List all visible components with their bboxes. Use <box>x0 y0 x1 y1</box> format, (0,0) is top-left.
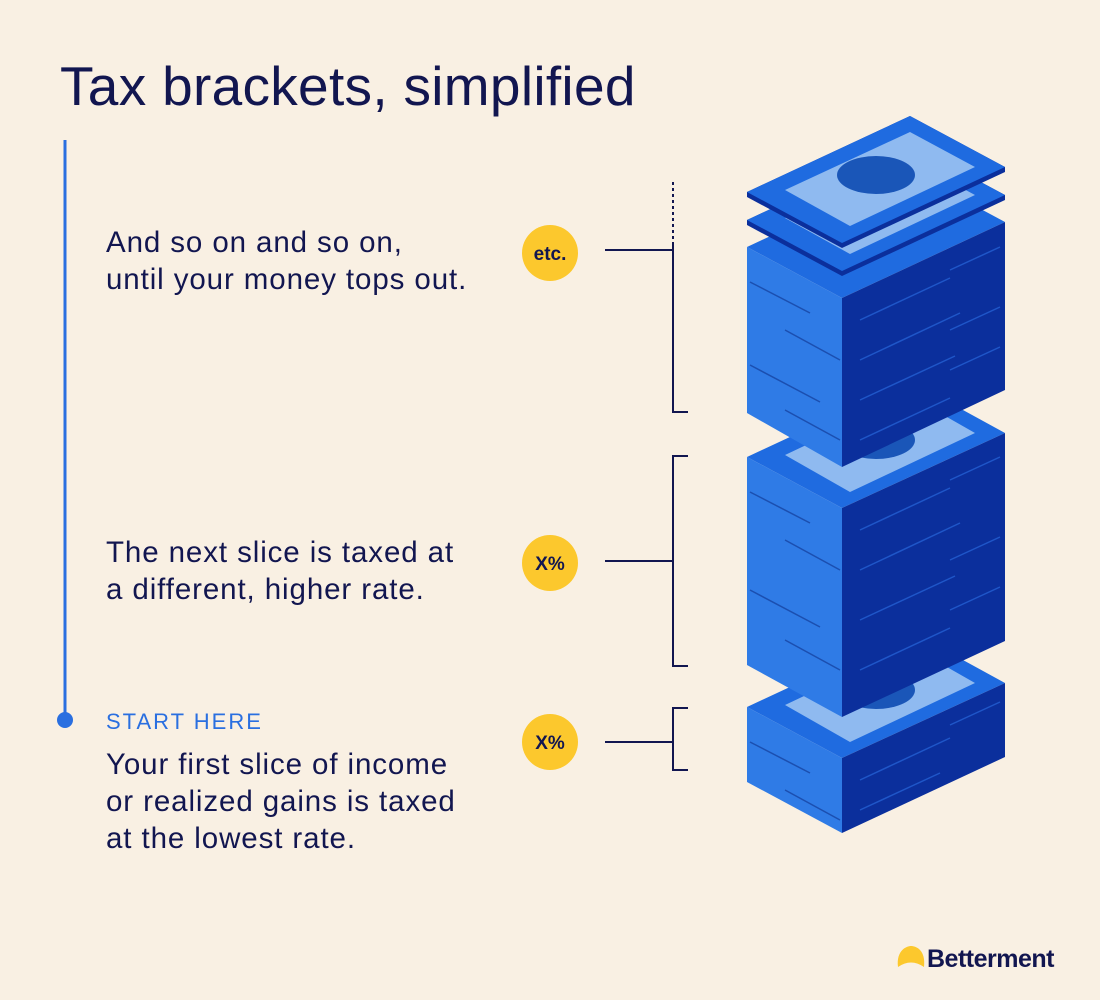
text: next slice <box>106 536 454 606</box>
text: etc: And so on and so on, <box>106 226 403 259</box>
bracket: middle <box>605 456 688 666</box>
stack: middle <box>747 381 1005 717</box>
bill 2 <box>747 144 1005 276</box>
text: first slice: Your first slice of income <box>106 748 448 781</box>
title: Tax brackets, simplified <box>60 55 636 117</box>
badge: x% bottom <box>522 714 578 770</box>
text: next slice: The next slice is taxed at <box>106 536 454 569</box>
stack: bottom <box>747 631 1005 833</box>
badge: etc <box>522 225 578 281</box>
bracket: bottom <box>605 708 688 770</box>
badge: etc: etc. <box>534 244 566 265</box>
logo: Betterment <box>927 945 1055 973</box>
text: first slice <box>106 748 456 855</box>
badge: x% bottom: X% <box>535 733 565 754</box>
bracket: top <box>605 182 688 412</box>
text: etc <box>106 226 467 296</box>
text: first slice: or realized gains is taxed <box>106 785 456 818</box>
badge: x% middle: X% <box>535 554 565 575</box>
stack: top <box>747 116 1005 467</box>
bill 1 <box>747 116 1005 248</box>
text: etc: until your money tops out. <box>106 263 467 296</box>
timeline line <box>57 140 73 728</box>
label: start here: START HERE <box>106 709 263 734</box>
text: first slice: at the lowest rate. <box>106 822 356 855</box>
badge: x% middle <box>522 535 578 591</box>
text: next slice: a different, higher rate. <box>106 573 425 606</box>
